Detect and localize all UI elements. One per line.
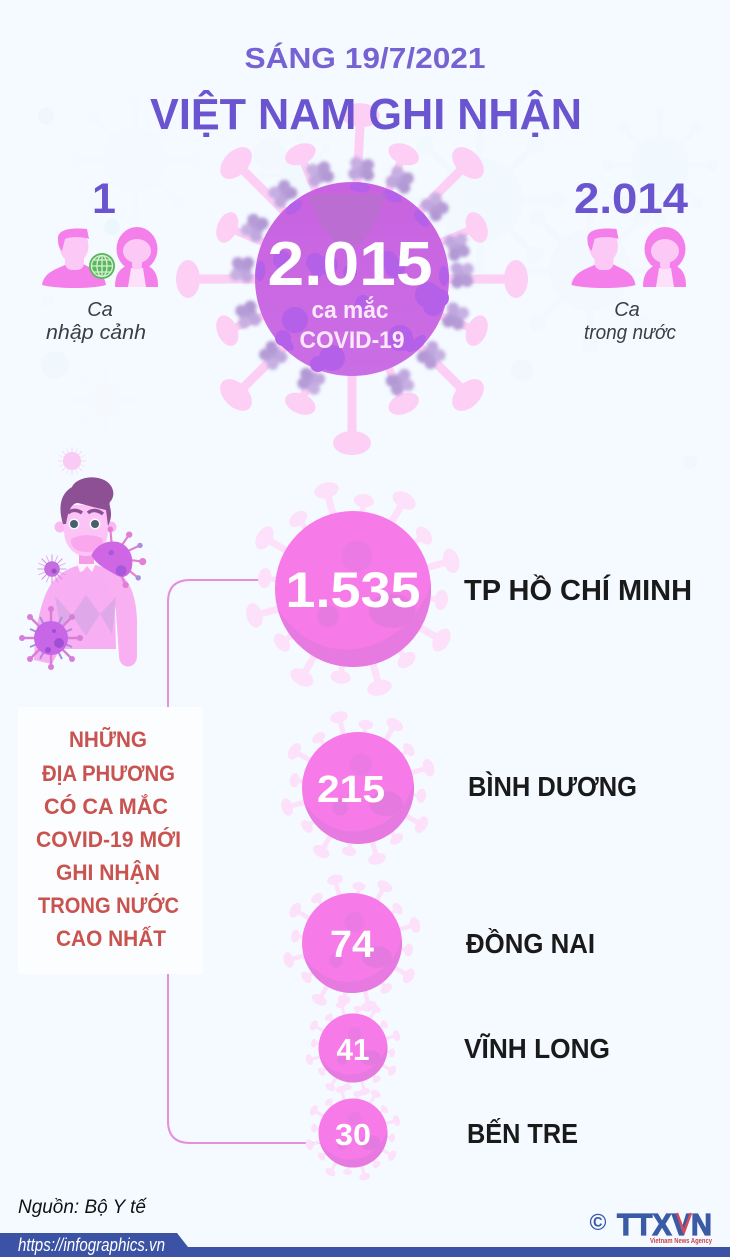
heading text: NHỮNG — [69, 727, 147, 752]
icon: globe — [89, 253, 115, 279]
number: 2.014 — [574, 175, 688, 223]
eyes and brows — [68, 510, 103, 530]
ears — [54, 522, 116, 532]
hair — [60, 477, 113, 526]
case number: 2.015 — [268, 230, 432, 299]
spike blobs — [229, 156, 474, 399]
heading text: COVID-19 MỚI — [36, 827, 181, 852]
sweater body — [34, 564, 116, 664]
label: Vĩnh Long: VĨNH LONG — [464, 1033, 610, 1064]
logo: TTXVN: Vietnam News Agency — [650, 1236, 713, 1245]
lower virus — [19, 606, 83, 670]
sweater diamonds — [55, 595, 116, 636]
neck — [79, 548, 94, 564]
icon: people — [42, 227, 158, 288]
virus: Đồng Nai — [282, 873, 422, 1013]
spikes — [176, 102, 528, 455]
right arm — [104, 567, 137, 666]
caption: Ca — [87, 299, 113, 321]
small floating virus — [58, 447, 86, 475]
icon: people — [572, 227, 686, 288]
stat: imported case — [42, 175, 158, 344]
heading text: CAO NHẤT — [56, 926, 167, 951]
illustration: worried man with mask — [19, 447, 146, 670]
caption: Ca — [614, 299, 640, 321]
case caption line one: ca mắc — [312, 296, 388, 324]
caption — [46, 299, 146, 344]
title: date: SÁNG 19/7/2021 — [244, 41, 486, 75]
panel: caption box — [18, 707, 203, 974]
virus: Vĩnh Long — [305, 1000, 401, 1096]
heading text: TRONG NƯỚC — [38, 893, 179, 918]
central virus: total cases — [176, 102, 528, 455]
number: 1.535 — [286, 562, 420, 618]
mask — [71, 535, 103, 552]
virus: TP Hồ Chí Minh — [244, 480, 462, 698]
collar — [76, 561, 97, 572]
number: 74 — [330, 924, 374, 966]
disc patches — [254, 181, 449, 372]
caption: trong nước — [584, 322, 676, 344]
face — [64, 505, 108, 556]
label: Bình Dương: BÌNH DƯƠNG — [468, 771, 637, 802]
source: Nguồn: Bộ Y tế — [18, 1197, 147, 1218]
heading text: GHI NHẬN — [56, 860, 160, 885]
label: TP Hồ Chí Minh: TP HỒ CHÍ MINH — [464, 573, 692, 607]
logo: TTXVN: TTXVN — [617, 1207, 712, 1242]
chest virus — [37, 554, 67, 584]
number: 215 — [317, 769, 385, 811]
heading text: CÓ CA MẮC — [44, 794, 168, 819]
faint background viruses — [38, 94, 719, 469]
url: https://infographics.vn — [18, 1235, 165, 1255]
connector line — [168, 580, 322, 1143]
number: 30 — [335, 1117, 371, 1152]
heading text — [36, 727, 181, 951]
stat: domestic cases — [572, 175, 688, 344]
heading text: ĐỊA PHƯƠNG — [42, 761, 175, 786]
disc — [255, 182, 449, 376]
label: Bến Tre: BẾN TRE — [467, 1118, 578, 1149]
number: 41 — [336, 1032, 370, 1067]
logo: TTXVN — [590, 1207, 713, 1245]
caption — [584, 299, 676, 344]
number: 1 — [92, 175, 116, 223]
footer bar — [0, 1233, 730, 1257]
caption: nhập cảnh — [46, 322, 146, 344]
logo: TTXVN: © — [590, 1209, 607, 1235]
case caption line two: COVID-19 — [300, 327, 404, 354]
title: main: VIỆT NAM GHI NHẬN — [150, 89, 582, 139]
label: Đồng Nai: ĐỒNG NAI — [466, 928, 595, 959]
virus: Bến Tre — [305, 1085, 401, 1181]
shoulder virus — [91, 526, 146, 588]
virus: Bình Dương — [279, 709, 436, 867]
